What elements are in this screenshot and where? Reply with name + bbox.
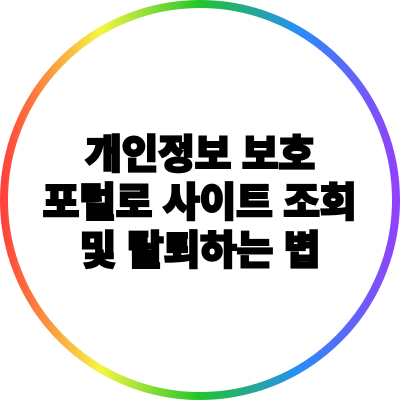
title: 개인정보 보호	[85, 133, 315, 177]
title: 포털로 사이트 조회	[43, 181, 356, 225]
title	[43, 133, 356, 273]
title: 및 탈퇴하는 볍	[80, 229, 320, 273]
